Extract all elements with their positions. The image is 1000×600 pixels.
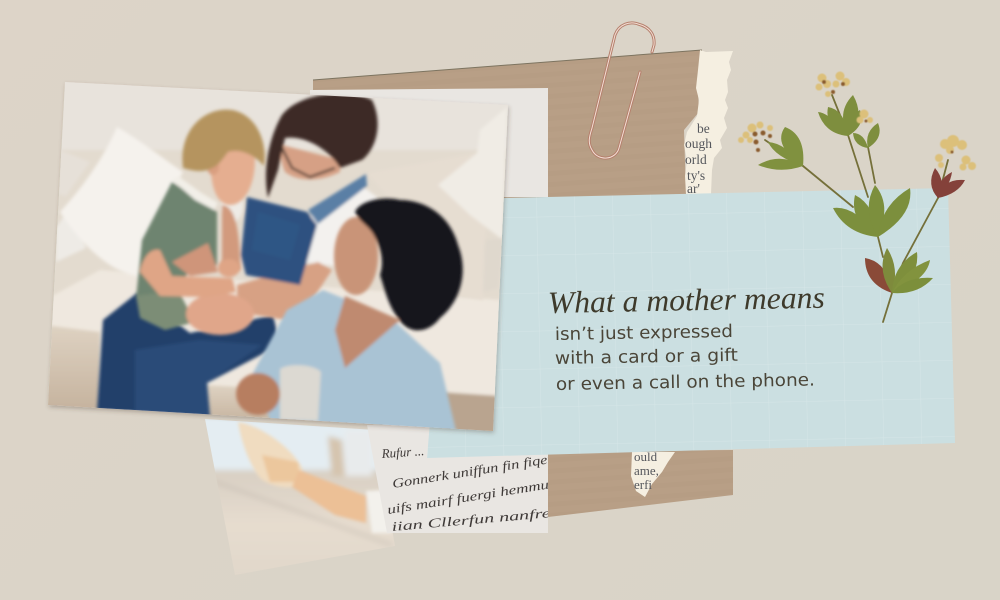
mother in denim shirt [236, 198, 463, 435]
torn paper scrap bottom [631, 449, 675, 497]
sofa [45, 150, 510, 435]
book text fragments: ame, [634, 463, 659, 478]
leaf cluster lower [865, 248, 933, 293]
arm [237, 262, 332, 322]
torn paper strip top [684, 50, 733, 196]
book text fragments: ough [685, 136, 712, 151]
small photo: holding hands [205, 419, 394, 560]
neck [335, 296, 400, 368]
book text fragments: orld [685, 152, 707, 167]
main photo: mothers and child [40, 80, 520, 440]
hair [266, 93, 378, 198]
face [281, 145, 340, 180]
book text fragments: ould [634, 449, 658, 464]
hand [172, 243, 218, 276]
book text fragments: erfi [634, 477, 652, 492]
mug [280, 365, 321, 421]
overalls [241, 197, 317, 285]
handwriting: iian Cllerfun nanfref [391, 504, 560, 534]
leaf cluster top right [931, 168, 965, 198]
hair [182, 110, 265, 171]
pressed flower sprig [738, 72, 976, 322]
leaf cluster upper left [758, 127, 803, 170]
book text fragments [634, 449, 659, 492]
kraft paper [313, 50, 733, 517]
leaf cluster centre [833, 185, 910, 237]
face [334, 217, 378, 295]
paperclip [589, 23, 654, 158]
handwritten letter paper [310, 88, 560, 534]
book text fragments [685, 121, 712, 196]
arm and clasped hand [238, 422, 392, 533]
head [211, 150, 255, 205]
body text: with a card or a gift [555, 346, 738, 369]
book text fragments: ar' [687, 181, 700, 196]
jeans [97, 293, 280, 417]
ear [206, 166, 218, 176]
yellow blossoms [738, 72, 976, 170]
heading: What a mother means [547, 280, 825, 320]
body text: isn’t just expressed [555, 322, 733, 345]
wall [40, 80, 520, 440]
boy [136, 110, 265, 335]
arm [140, 250, 236, 297]
glasses [282, 148, 335, 177]
book text fragments: ty's [687, 168, 705, 183]
leg [186, 293, 254, 335]
shirt [253, 290, 457, 435]
hand [236, 373, 280, 415]
hair curls [355, 198, 463, 330]
mother with glasses [221, 93, 378, 322]
handwriting: uifs mairf fuergi hemmun [386, 475, 558, 517]
white shirt [303, 186, 378, 266]
body text: or even a call on the phone. [556, 370, 815, 395]
pillows [56, 113, 506, 276]
sky and pavement [205, 419, 394, 560]
handwriting: Rufur ... [380, 443, 425, 461]
teal grid note panel [427, 188, 955, 458]
body text [555, 322, 815, 395]
shorts [134, 294, 191, 332]
book text fragments: be [697, 121, 710, 136]
stems [765, 95, 948, 322]
leaf cluster top [818, 95, 880, 148]
green shirt [136, 182, 217, 298]
handwriting: Gonnerk uniffun fin fiqeu [391, 450, 557, 491]
handwriting [382, 448, 548, 531]
